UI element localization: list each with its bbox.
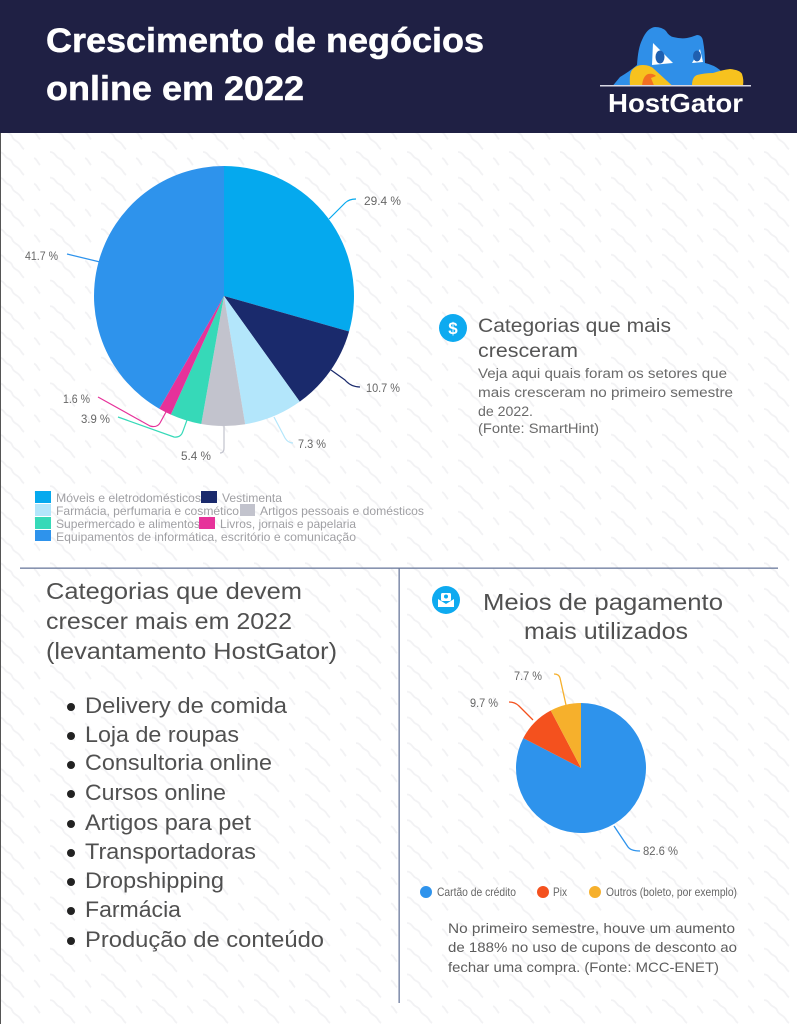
pie chart: meios de pagamento xyxy=(470,671,678,858)
icon: payment envelope xyxy=(432,586,460,614)
list: categorias: Produção de conteúdo xyxy=(85,927,324,952)
value labels: 5.4 % xyxy=(181,451,211,463)
list: categorias: Delivery de comida xyxy=(85,693,288,718)
legend: categorias: Farmácia, perfumaria e cosmético xyxy=(56,504,239,518)
text block: categorias que mais cresceram: Veja aqui quais foram os setores que xyxy=(478,366,727,381)
value labels: 3.9 % xyxy=(81,414,110,426)
text block: cupons de desconto: de 188% no uso de cupons de desconto ao xyxy=(448,939,737,955)
text block: cupons de desconto xyxy=(448,920,737,975)
heading: categorias que devem crescer: (levantamento HostGator) xyxy=(46,638,337,664)
list: categorias: Dropshipping xyxy=(85,868,224,893)
heading: categorias que devem crescer: crescer mais em 2022 xyxy=(46,608,292,634)
value labels: 9.7 % xyxy=(470,698,498,710)
title xyxy=(46,22,484,108)
heading: meios de pagamento: mais utilizados xyxy=(524,618,688,644)
list: categorias: Transportadoras xyxy=(85,839,256,864)
value labels: 7.7 % xyxy=(514,671,542,683)
value labels: 82.6 % xyxy=(643,846,678,858)
legend: categorias: Equipamentos de informática, escritório e comunicação xyxy=(56,530,356,544)
text block: cupons de desconto: No primeiro semestre, houve um aumento xyxy=(448,920,735,936)
heading: categorias que devem crescer: Categorias que devem xyxy=(46,578,302,604)
list: categorias: Consultoria online xyxy=(85,750,272,775)
list: categorias xyxy=(67,693,324,952)
heading: categorias que devem crescer xyxy=(46,578,337,664)
pie chart: categorias que mais cresceram xyxy=(25,166,401,463)
value labels xyxy=(25,196,401,463)
leader lines xyxy=(67,199,360,453)
legend: categorias: Vestimenta xyxy=(222,491,282,505)
title: Crescimento de negócios xyxy=(46,22,484,60)
legend: categorias: Artigos pessoais e domésticos xyxy=(260,504,424,518)
icon: dollar xyxy=(439,314,467,342)
legend: meios de pagamento: Outros (boleto, por exemplo) xyxy=(606,885,737,899)
header banner xyxy=(0,0,797,133)
list: categorias: Artigos para pet xyxy=(85,810,251,835)
value labels: 29.4 % xyxy=(364,196,401,208)
text block: categorias que mais cresceram: Categorias que mais xyxy=(478,315,671,337)
title: online em 2022 xyxy=(46,70,304,108)
legend: meios de pagamento: Cartão de crédito xyxy=(437,885,516,899)
list: categorias: Farmácia xyxy=(85,897,182,922)
text block: categorias que mais cresceram: mais cresceram no primeiro semestre xyxy=(478,385,733,400)
text block: categorias que mais cresceram: (Fonte: SmartHint) xyxy=(478,421,599,436)
text block: categorias que mais cresceram xyxy=(478,315,733,436)
legend: categorias xyxy=(35,491,424,544)
legend: categorias: Supermercado e alimentos xyxy=(56,517,200,531)
legend: meios de pagamento: Pix xyxy=(553,885,567,899)
text block: categorias que mais cresceram: cresceram xyxy=(478,340,578,362)
value labels: 41.7 % xyxy=(25,251,58,263)
value labels: 1.6 % xyxy=(63,394,90,406)
value labels: 10.7 % xyxy=(366,383,400,395)
value labels xyxy=(470,671,678,858)
icon: HostGator logo: HostGator xyxy=(608,88,743,118)
icon: dollar: $ xyxy=(448,319,458,338)
legend: categorias: Móveis e eletrodomésticos xyxy=(56,491,201,505)
value labels: 7.3 % xyxy=(298,439,326,451)
heading: meios de pagamento xyxy=(483,589,723,644)
leader lines xyxy=(509,674,640,851)
text block: cupons de desconto: fechar uma compra. (Fonte: MCC-ENET) xyxy=(448,959,719,975)
heading: meios de pagamento: Meios de pagamento xyxy=(483,589,723,615)
icon: HostGator logo xyxy=(600,27,751,118)
list: categorias: Loja de roupas xyxy=(85,722,239,747)
legend: meios de pagamento xyxy=(420,885,737,899)
legend: categorias: Livros, jornais e papelaria xyxy=(220,517,356,531)
text block: categorias que mais cresceram: de 2022. xyxy=(478,404,533,419)
list: categorias: Cursos online xyxy=(85,780,226,805)
